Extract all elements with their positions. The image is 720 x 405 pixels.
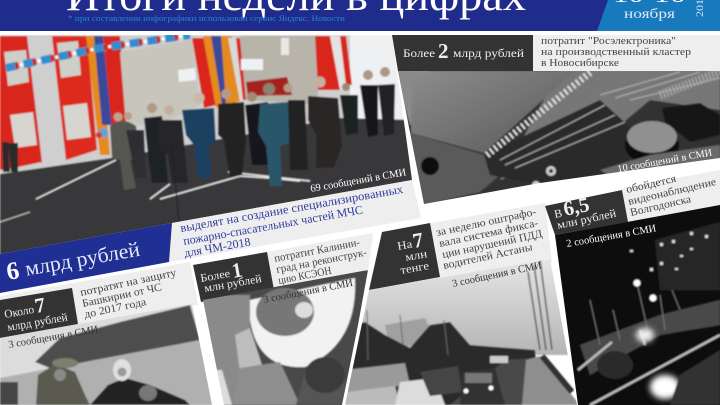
description: до 2017 года [83,296,147,321]
description [625,173,717,219]
figure: около 7 млрд: Около [3,304,35,321]
date box: ноября [624,7,676,22]
photo: river rescue [0,300,215,405]
description: потратят на защиту [79,267,178,299]
description [273,237,368,287]
message count: 3 сообщения в СМИ [451,260,543,290]
description: вала система фикса- [438,217,540,250]
figure: на 7 млн тенге: тенге [399,260,430,277]
description [435,206,544,272]
photo: night city [555,205,720,405]
message count: 2 сообщения в СМИ [566,223,658,250]
figure: в 6,5 млн: В [553,207,564,221]
figure: более 1 млн [199,257,263,295]
description: Башкирии от ЧС [81,281,163,310]
figure: более 2 млрд: млрд рублей [453,48,524,60]
description: выделят на создание специализированных [179,182,404,235]
description: град на реконструк- [275,247,368,276]
figure: более 1 млн: млн рублей [203,273,263,295]
figure: в 6,5 млн: млн рублей [556,208,617,232]
figure: на 7 млн тенге: 7 [411,227,425,253]
photo: circuit board [395,70,720,210]
figure: в 6,5 млн [553,192,617,232]
description: за неделю оштрафо- [435,206,538,239]
description: для ЧМ-2018 [183,235,252,260]
figure: на 7 млн тенге: На [396,239,413,253]
figure: 6 млрд рублей: 6 [4,257,21,286]
figure: на 7 млн тенге [396,227,430,277]
panel: Kaliningrad KSEON [193,233,373,405]
description [79,267,178,321]
message count: 3 сообщения в СМИ [262,278,354,306]
description: цию КСЭОН [277,265,333,287]
description: на производственный кластер [541,46,692,58]
figure: 6 млрд рублей: млрд рублей [23,237,142,281]
date box [597,0,720,31]
figure: более 2 млрд: 2 [438,39,448,63]
figure: около 7 млрд [3,292,69,334]
balloon garland [6,35,190,138]
figure: на 7 млн тенге: млн [404,248,428,264]
description: обойдется [625,173,677,196]
panel: Astana traffic fines [340,203,580,405]
photo: megaphone [200,270,370,405]
figure: более 2 млрд: Более [403,48,435,60]
figure: более 1 млн: Более [199,268,231,285]
panel: fire station photo [0,35,420,260]
figure: более 2 млрд [403,39,524,63]
figure: в 6,5 млн: 6,5 [561,192,591,221]
message count: 3 сообщения в СМИ [8,324,100,351]
message count: 69: 69 сообщений в СМИ [310,167,407,195]
description: потратит "Росэлектроника" [541,35,676,47]
subtitle note: * при составлении инфографики использован сервис Яндекс. Новости [68,14,346,23]
people group [2,67,395,222]
message count: 10: 10 сообщений в СМИ [617,147,713,175]
figure: около 7 млрд: млрд рублей [6,312,69,334]
panel: Volgodonsk video surveillance [545,170,720,405]
header banner [0,0,720,31]
description: видеонаблюдение [627,176,717,208]
description: в Новосибирске [541,57,619,69]
description: потратит Калинин- [273,237,361,265]
photo: traffic jam [340,255,580,405]
figure: около 7 млрд: 7 [33,292,47,318]
description: пожарно-спасательных частей МЧС [182,203,364,248]
panel: Bashkiria protection [0,262,215,405]
description: Волгодонска [629,193,692,219]
panel: 6 billion roubles callout [0,180,421,293]
description: водителей Астаны [442,241,534,272]
description [541,35,692,69]
figure: более 1 млн: 1 [230,257,244,283]
panel: Rostelectronics chip [392,35,720,210]
description [179,182,404,260]
description: ции нарушений ПДД [441,228,544,261]
